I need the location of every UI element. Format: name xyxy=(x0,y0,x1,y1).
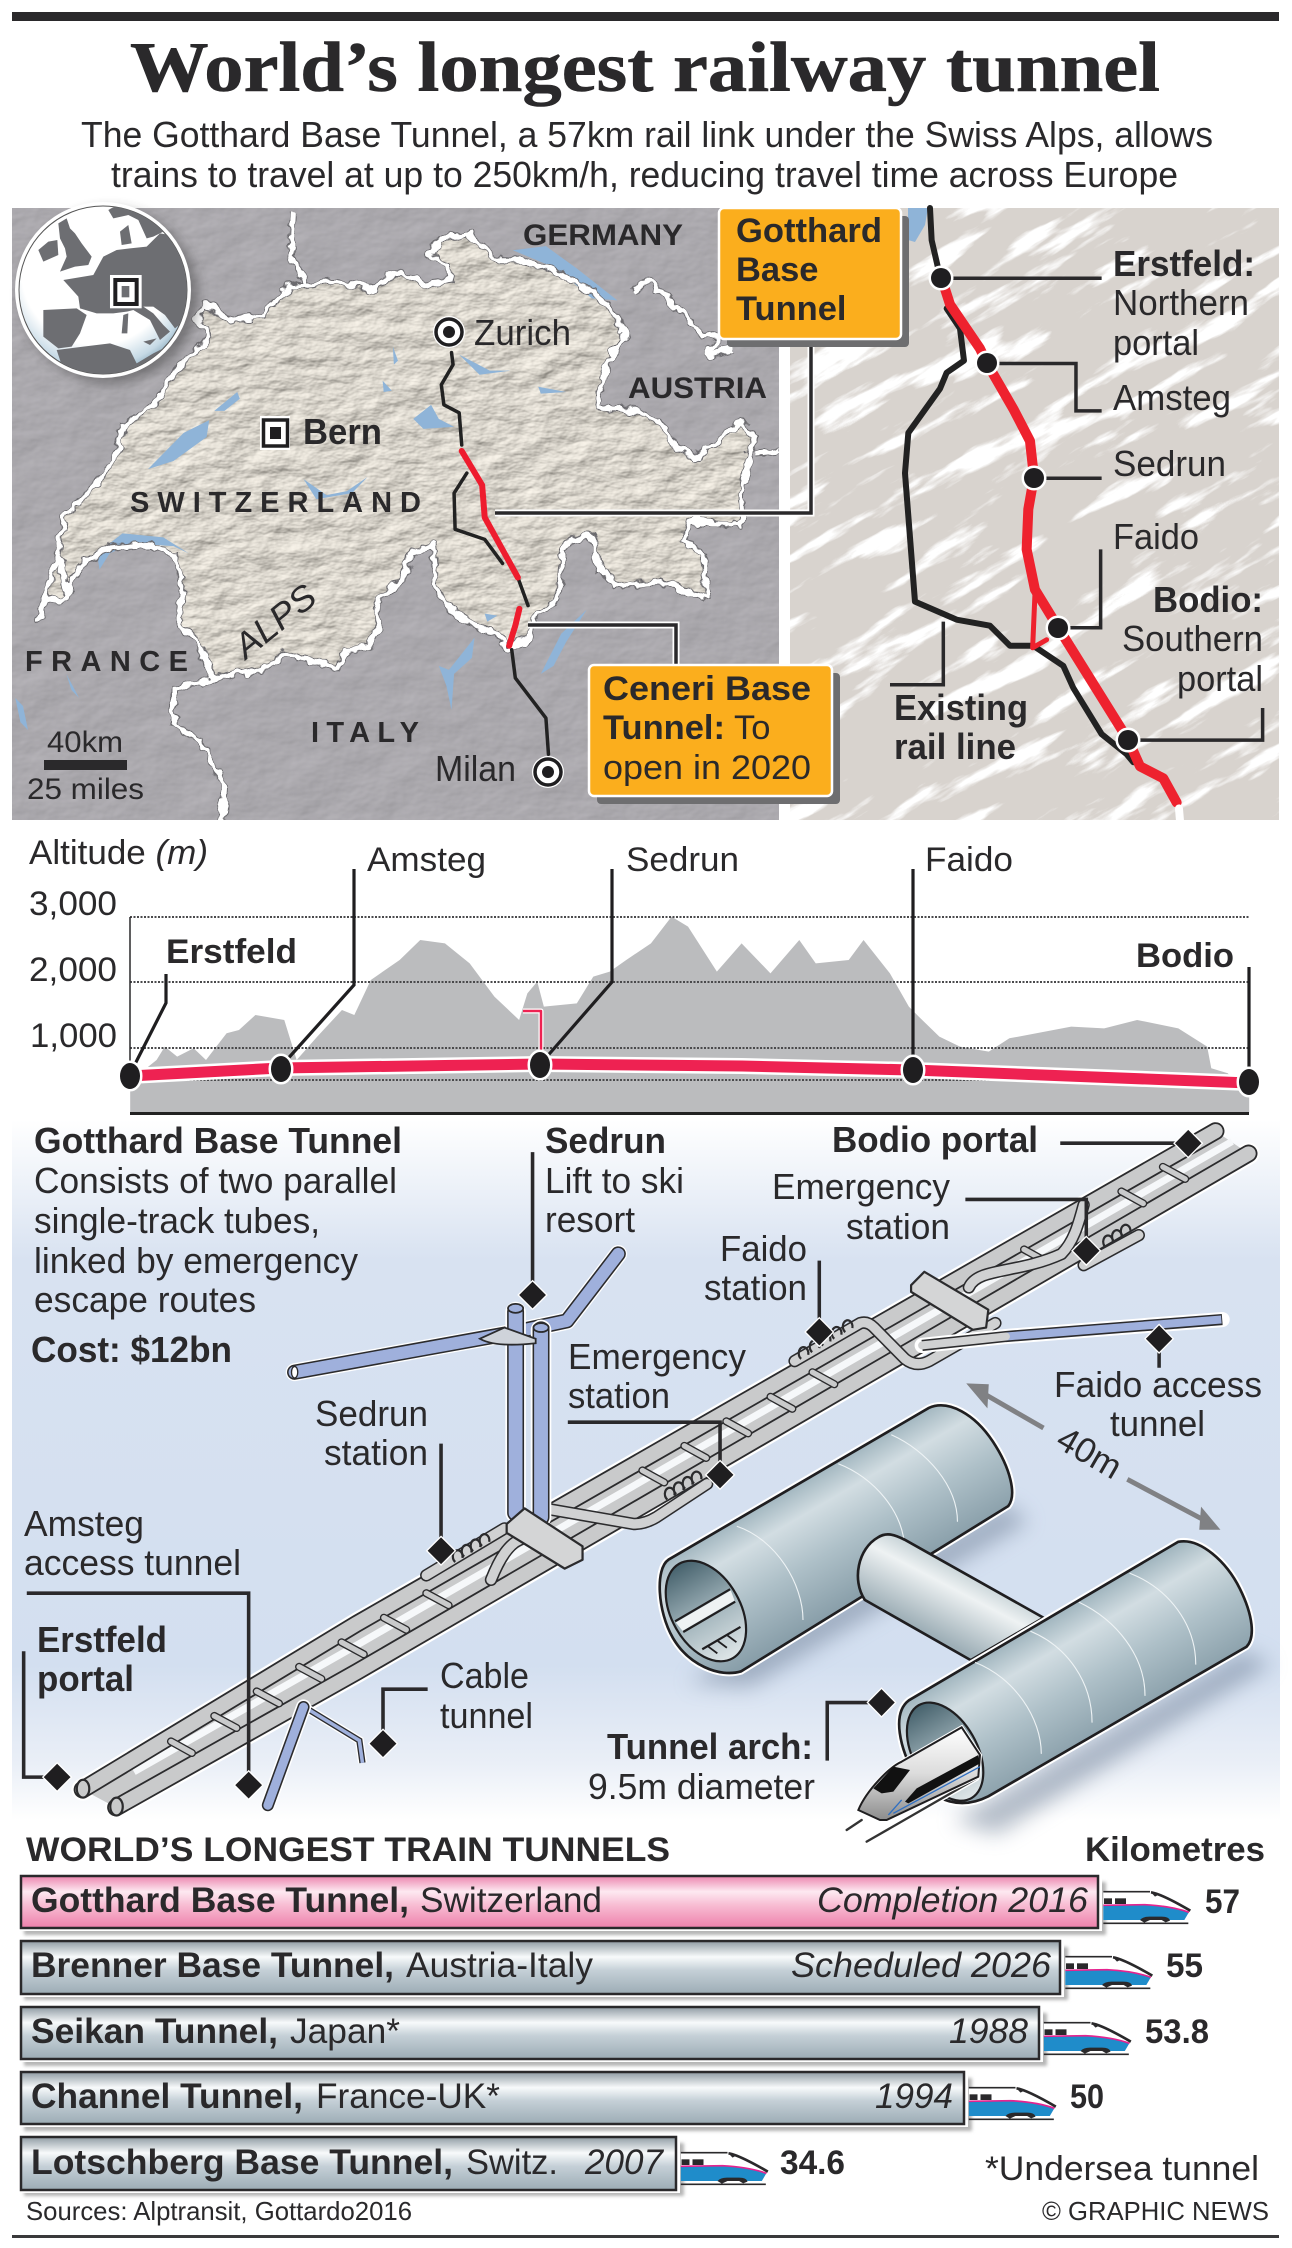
callout line: Ceneri xyxy=(528,625,676,665)
station labels: Erstfeld xyxy=(166,933,297,971)
callout: Gotthard Base Tunnel: Gotthard xyxy=(736,212,882,250)
cross passages xyxy=(171,1167,1185,1753)
label: Sedrun lift: Lift to ski xyxy=(545,1160,684,1201)
country labels: GERMANY xyxy=(523,219,683,252)
text: Gotthard Base Tunnel description xyxy=(31,1120,402,1370)
bar: Lotschberg: Lotschberg Base Tunnel, xyxy=(31,2143,453,2182)
emergency station bypass (mid) xyxy=(549,1472,707,1524)
label: Sedrun station: Sedrun xyxy=(315,1393,428,1434)
bar: Channel: 50 xyxy=(1070,2078,1104,2116)
Sedrun shafts xyxy=(480,1304,549,1517)
label: Emergency station top: Emergency xyxy=(772,1166,950,1207)
mountain profile xyxy=(130,917,1249,1113)
route labels: Erstfeld: xyxy=(1113,243,1255,284)
label: Sedrun lift xyxy=(545,1120,684,1240)
top rule xyxy=(12,12,1279,21)
route labels: Bodio: xyxy=(1153,579,1263,620)
scale bar: 40km xyxy=(47,726,123,759)
label: Tunnel arch: Tunnel arch: xyxy=(607,1726,813,1767)
bar: Channel: Channel Tunnel, xyxy=(31,2077,303,2116)
bar: Channel: 1994 xyxy=(875,2077,953,2116)
label: Emergency station mid xyxy=(568,1336,746,1416)
label: Sedrun lift: Sedrun xyxy=(545,1120,666,1161)
station labels xyxy=(166,841,1234,975)
callout: Ceneri Base Tunnel: open in 2020 xyxy=(603,749,811,787)
label: Tunnel arch xyxy=(588,1726,815,1807)
heading: bar chart: WORLD’S LONGEST TRAIN TUNNELS xyxy=(26,1831,670,1869)
callout connector: Gotthard xyxy=(495,339,811,513)
bar: Lotschberg: Switz. xyxy=(466,2143,558,2182)
tube opening xyxy=(649,1546,763,1676)
pointer: Faido access xyxy=(1146,1325,1172,1368)
route labels: Southern xyxy=(1122,618,1263,659)
country labels: SWITZERLAND xyxy=(130,487,421,519)
title: World’s longest railway tunnel xyxy=(130,29,1160,107)
bottom rule xyxy=(12,2235,1279,2238)
borders xyxy=(38,212,781,822)
bar: Gotthard: Completion 2016 xyxy=(817,1881,1089,1920)
bar: Seikan xyxy=(18,2004,1209,2066)
grid lines xyxy=(130,917,1249,1080)
bar: Channel xyxy=(18,2069,1104,2131)
label: Emergency station top xyxy=(772,1166,950,1247)
altitude chart xyxy=(29,834,1259,1115)
station labels: Faido xyxy=(925,841,1013,879)
route labels: rail line xyxy=(894,726,1016,767)
40m dimension arrows xyxy=(966,1383,1220,1530)
bar: Brenner: Scheduled 2026 xyxy=(791,1946,1052,1985)
pointer: Bodio portal xyxy=(1060,1130,1201,1157)
pointer: emergency station mid xyxy=(568,1422,733,1488)
lakes xyxy=(15,246,617,730)
callout: Gotthard Base Tunnel xyxy=(719,208,909,347)
axis labels: 1,000 xyxy=(30,1017,117,1055)
label: Faido access tunnel: tunnel xyxy=(1110,1403,1205,1444)
baseline xyxy=(130,1112,1249,1115)
label: Alps: ALPS xyxy=(225,577,324,668)
route labels: Sedrun xyxy=(1113,443,1226,484)
bar: Brenner xyxy=(18,1938,1203,2000)
label: Erstfeld portal xyxy=(37,1619,167,1699)
country labels: FRANCE xyxy=(25,646,188,678)
pointer: cable tunnel xyxy=(370,1689,428,1757)
callout: Gotthard Base Tunnel: Base xyxy=(736,251,818,289)
cross passage xyxy=(858,1534,1044,1660)
pointer: emergency station top xyxy=(965,1199,1100,1264)
train emerging from tunnel xyxy=(847,1727,980,1842)
label: Emergency station mid: Emergency xyxy=(568,1336,746,1377)
scale bar: 25 miles xyxy=(27,773,144,806)
label: Erstfeld portal: portal xyxy=(37,1658,134,1699)
bar: Gotthard: Switzerland xyxy=(420,1881,602,1920)
route labels: Faido xyxy=(1113,516,1199,557)
route labels: Northern xyxy=(1113,282,1249,323)
Faido station bypass xyxy=(795,1320,995,1364)
tunnel profile xyxy=(130,1011,1249,1083)
label: Faido station: station xyxy=(704,1267,807,1308)
bar: Lotschberg: 34.6 xyxy=(780,2144,845,2182)
label: Cable tunnel: tunnel xyxy=(440,1695,533,1736)
twin main tubes xyxy=(77,1131,1249,1815)
city: Milan: Milan xyxy=(435,748,516,789)
panel: Switzerland map xyxy=(12,208,781,822)
cable tunnel xyxy=(268,1707,362,1805)
connectors xyxy=(132,869,1249,1076)
subtitle: trains to travel at up to 250km/h, reducing travel time across Europe xyxy=(111,154,1178,195)
callout: Ceneri Base Tunnel: Tunnel: To xyxy=(603,709,770,747)
pointer: Sedrun station xyxy=(428,1444,454,1564)
subtitle xyxy=(81,114,1213,195)
Switzerland landmass xyxy=(38,234,755,678)
upper tube xyxy=(649,1405,1012,1676)
label: Sedrun station: station xyxy=(324,1432,428,1473)
lower tube xyxy=(891,1541,1252,1814)
city: Bern xyxy=(260,411,382,452)
label: Faido access tunnel xyxy=(1054,1364,1262,1444)
bar: Brenner: 55 xyxy=(1166,1947,1203,1985)
tunnel diagram xyxy=(77,1131,1249,1815)
text: Gotthard Base Tunnel description: Consists of two parallel xyxy=(34,1160,397,1201)
bar: Gotthard xyxy=(18,1873,1240,1935)
soft shadows xyxy=(688,1504,1271,1834)
country labels: ITALY xyxy=(311,717,419,749)
pointer: Faido station xyxy=(806,1261,833,1345)
unit label: Kilometres xyxy=(1085,1831,1265,1869)
label: Amsteg access tunnel xyxy=(24,1503,241,1583)
city: Zurich xyxy=(433,312,571,353)
label: Emergency station top: station xyxy=(846,1206,950,1247)
access tunnel: Sedrun top xyxy=(291,1254,618,1378)
city: Bern: Bern xyxy=(303,411,382,452)
text: Gotthard Base Tunnel description: Cost: $12bn xyxy=(31,1329,232,1370)
pointer: Sedrun lift xyxy=(519,1152,546,1308)
bar: Brenner: Brenner Base Tunnel, xyxy=(31,1946,394,1985)
pointer: tunnel arch xyxy=(827,1689,895,1761)
label: Erstfeld portal: Erstfeld xyxy=(37,1619,167,1660)
chart title: Altitude (m) xyxy=(29,834,208,872)
sources: Sources: Alptransit, Gottardo2016 xyxy=(26,2196,412,2226)
station labels: Sedrun xyxy=(626,841,739,879)
text: Gotthard Base Tunnel description: escape routes xyxy=(34,1279,256,1320)
callout connector: Ceneri xyxy=(528,625,676,665)
bar: Seikan: 53.8 xyxy=(1145,2013,1209,2051)
text: 40m dimension: 40m xyxy=(1050,1419,1128,1487)
label: Faido station: Faido xyxy=(720,1228,807,1269)
3D tunnel cutaway xyxy=(649,1405,1271,1834)
country labels xyxy=(25,219,767,749)
pointer: Amsteg access xyxy=(27,1593,262,1799)
country labels: AUSTRIA xyxy=(628,372,767,405)
diagram connectors xyxy=(24,1130,1220,1799)
axis labels xyxy=(29,885,117,1055)
Sedrun cavern block xyxy=(507,1508,583,1569)
bar: Brenner: Austria-Italy xyxy=(406,1946,594,1985)
route labels: portal xyxy=(1113,322,1199,363)
panel: tunnel diagram background xyxy=(12,1120,1280,1820)
scale bar xyxy=(27,726,144,806)
route labels: Amsteg xyxy=(1113,377,1231,418)
bar: Lotschberg xyxy=(18,2134,845,2196)
station dots xyxy=(120,1052,1259,1095)
station markers xyxy=(931,268,1138,750)
label: Faido station xyxy=(704,1228,807,1308)
route labels: Existing xyxy=(894,687,1028,728)
bar: Gotthard: 57 xyxy=(1205,1883,1240,1921)
bar: Channel: France-UK* xyxy=(316,2077,500,2116)
callout line: Gotthard xyxy=(495,339,811,513)
connector lines xyxy=(890,278,1263,740)
label: Cable tunnel xyxy=(440,1655,533,1736)
Gotthard tunnel route xyxy=(942,278,1180,820)
bar: Seikan: 1988 xyxy=(949,2012,1029,2051)
subtitle: The Gotthard Base Tunnel, a 57km rail link under the Swiss Alps, allows xyxy=(81,114,1213,155)
bar: Lotschberg: 2007 xyxy=(584,2143,665,2182)
label: Sedrun lift: resort xyxy=(545,1199,635,1240)
Sedrun station bypass xyxy=(426,1528,520,1580)
credit: © GRAPHIC NEWS xyxy=(1042,2196,1269,2226)
label: Amsteg access tunnel: Amsteg xyxy=(24,1503,144,1544)
axis labels: 3,000 xyxy=(29,885,117,923)
callout: Gotthard Base Tunnel: Tunnel xyxy=(736,290,847,328)
Faido access tunnel xyxy=(922,1320,1222,1345)
route labels xyxy=(894,243,1263,767)
callout: Ceneri Base Tunnel: Ceneri Base xyxy=(603,670,811,708)
route labels: portal xyxy=(1177,658,1263,699)
city: Zurich: Zurich xyxy=(474,312,571,353)
city: Milan xyxy=(435,748,564,789)
label: Tunnel arch: 9.5m diameter xyxy=(588,1766,815,1807)
station labels: Amsteg xyxy=(367,841,486,879)
axis labels: 2,000 xyxy=(29,951,117,989)
label: Amsteg access tunnel: access tunnel xyxy=(24,1542,241,1583)
text: Gotthard Base Tunnel description: Gotthard Base Tunnel xyxy=(34,1120,402,1161)
bar: Seikan: Japan* xyxy=(290,2012,400,2051)
bar: Seikan: Seikan Tunnel, xyxy=(31,2012,278,2051)
label: Cable tunnel: Cable xyxy=(440,1655,529,1696)
text: Gotthard Base Tunnel description: linked by emergency xyxy=(34,1240,358,1281)
label: Emergency station mid: station xyxy=(568,1375,670,1416)
label: Bodio portal: Bodio portal xyxy=(832,1119,1038,1160)
bar: Gotthard: Gotthard Base Tunnel, xyxy=(31,1881,409,1920)
text: Gotthard Base Tunnel description: single-track tubes, xyxy=(34,1200,320,1241)
globe locator xyxy=(15,202,200,383)
Faido cavern block xyxy=(911,1272,988,1330)
callout: Ceneri Base Tunnel xyxy=(589,665,840,804)
panel: tunnel route detail map xyxy=(790,205,1279,820)
pointer: Erstfeld portal xyxy=(24,1651,71,1790)
station labels: Bodio xyxy=(1136,937,1234,975)
label: Faido access tunnel: Faido access xyxy=(1054,1364,1262,1405)
upper emergency station bypass xyxy=(969,1205,1139,1287)
footnote: *Undersea tunnel xyxy=(985,2150,1259,2188)
existing rail line xyxy=(905,208,1133,762)
rail routes xyxy=(441,353,548,754)
label: Sedrun station xyxy=(315,1393,428,1473)
bar chart xyxy=(18,1873,1240,2196)
